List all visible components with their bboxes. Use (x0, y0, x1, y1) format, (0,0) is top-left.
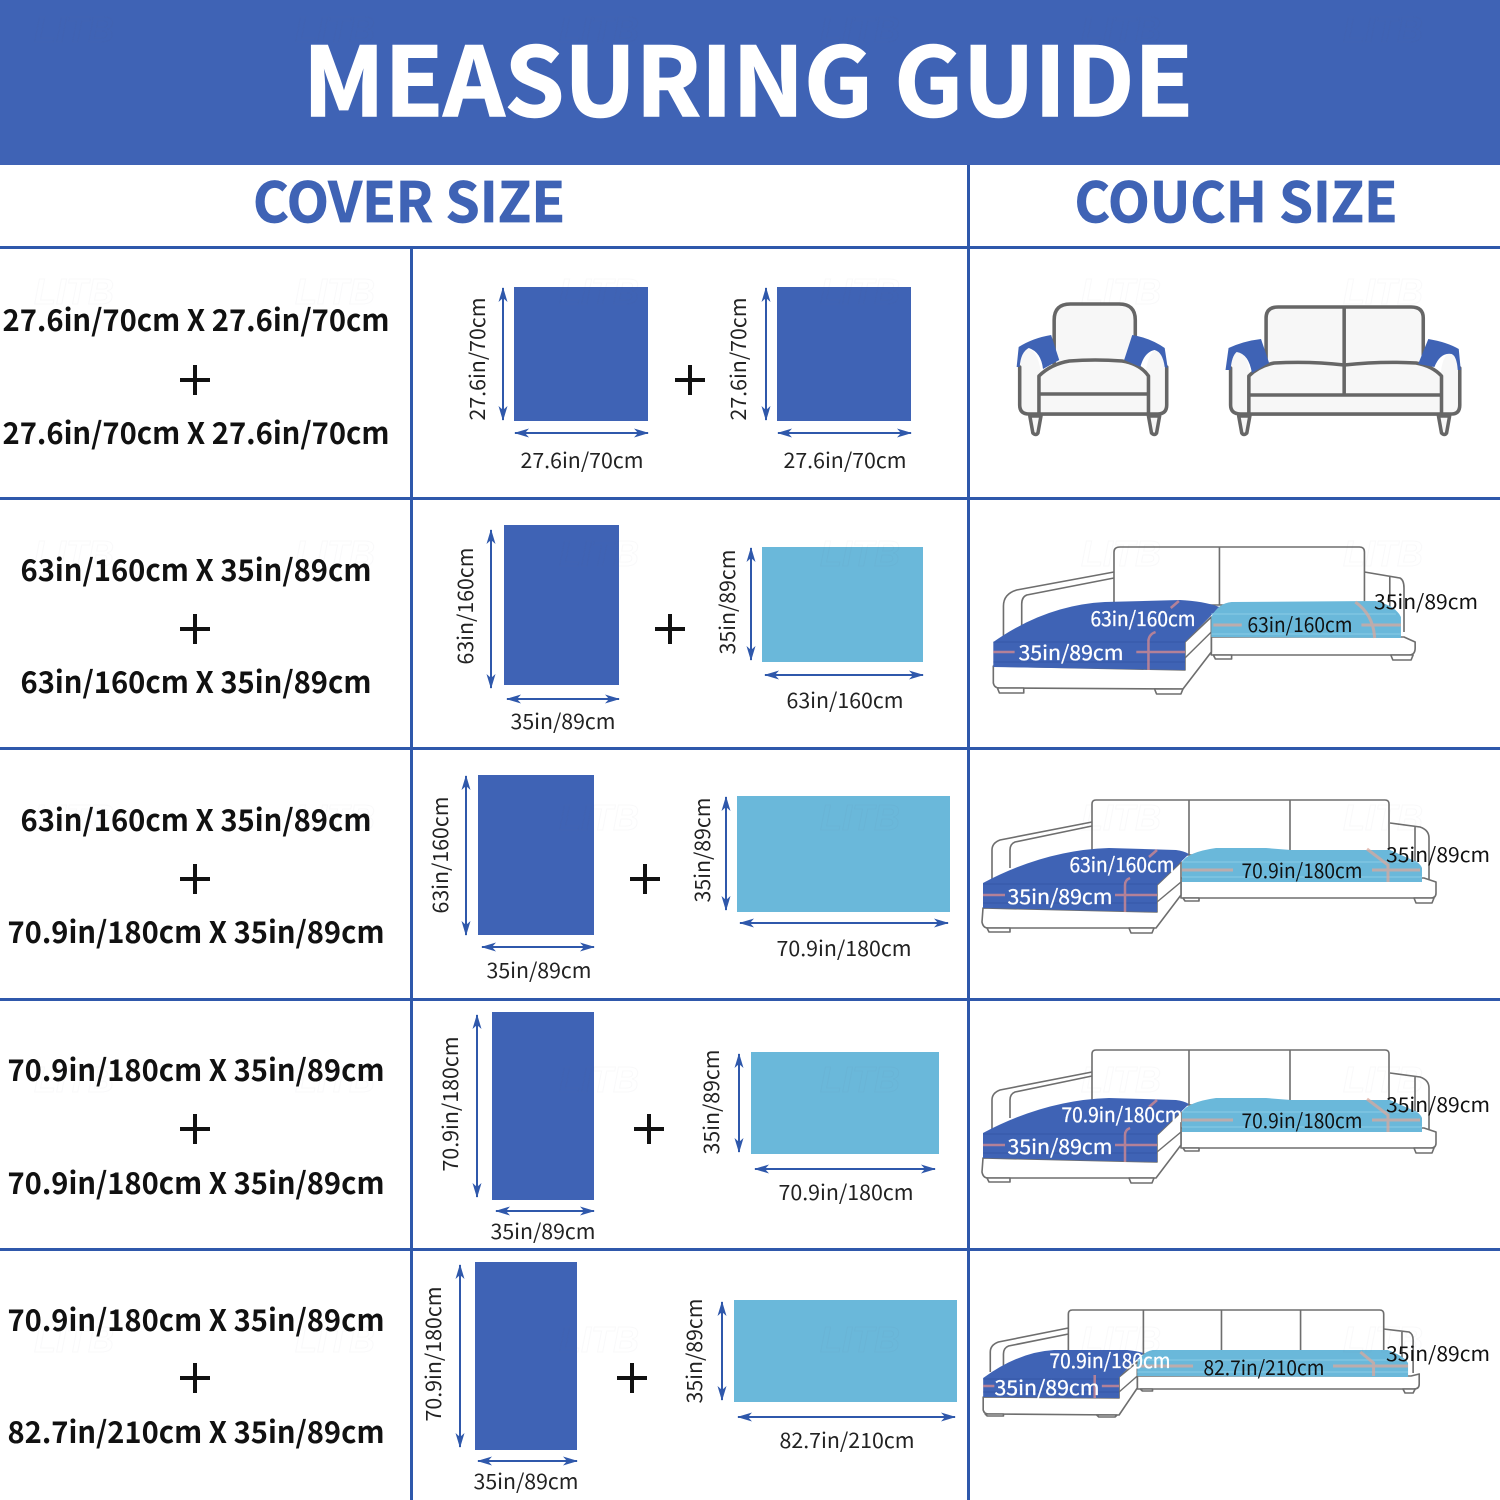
illustration: sectional sofa row 5: 70.9in/180cm (1050, 1345, 1170, 1374)
watermark: LITB repeated: LITB (820, 1059, 900, 1100)
illustration: sectional sofa row 2: 63in/160cm (1248, 609, 1352, 638)
watermark: LITB repeated: LITB (820, 9, 900, 50)
illustration: sectional sofa row 5: 35in/89cm (994, 1372, 1100, 1401)
diagram: row 1 cover panels: 27.6in/70cm (723, 298, 753, 420)
diagram: row 2 cover panels (450, 525, 923, 736)
diagram: row 4 cover panels: 70.9in/180cm (778, 1177, 914, 1207)
size text: row 4 (8, 1046, 384, 1203)
watermark: LITB repeated: LITB (1343, 271, 1423, 312)
watermark: LITB repeated: LITB (1343, 1059, 1423, 1100)
diagram: row 4 cover panels: 35in/89cm (490, 1216, 596, 1246)
size text: row 3 (8, 796, 384, 952)
size text: row 4: 70.9in/180cm X 35in/89cm (8, 1046, 384, 1090)
illustration: sectional sofa row 4: 35in/89cm (1008, 1131, 1112, 1160)
illustration: sectional sofa row 3: 70.9in/180cm (1242, 855, 1362, 884)
size text: row 4: 70.9in/180cm X 35in/89cm (8, 1159, 384, 1203)
diagram: row 1 cover panels: 27.6in/70cm (462, 298, 492, 420)
watermark: LITB repeated: LITB (559, 9, 639, 50)
watermark: LITB repeated: LITB (820, 533, 900, 574)
size text: row 2 (20, 546, 372, 702)
illustration: sectional sofa row 4: 70.9in/180cm (1062, 1099, 1182, 1128)
watermark: LITB repeated: LITB (559, 533, 639, 574)
watermark: LITB repeated: LITB (1343, 797, 1423, 838)
diagram: row 3 cover panels: 35in/89cm (486, 955, 592, 985)
diagram: row 5 cover panels (418, 1262, 957, 1496)
watermark: LITB repeated: LITB (295, 797, 375, 838)
watermark: LITB repeated: LITB (1081, 9, 1161, 50)
illustration: sectional sofa row 2: 35in/89cm (1018, 637, 1124, 666)
watermark: LITB repeated: LITB (34, 797, 114, 838)
watermark: LITB repeated: LITB (295, 533, 375, 574)
illustration: sectional sofa row 2 (993, 547, 1478, 694)
diagram: row 5 cover panels: 35in/89cm (679, 1298, 709, 1404)
watermark: LITB repeated: LITB (34, 533, 114, 574)
illustration: sectional sofa row 5 (983, 1310, 1490, 1417)
watermark: LITB repeated: LITB (34, 271, 114, 312)
watermark: LITB repeated: LITB (34, 9, 114, 50)
diagram: row 4 cover panels: 35in/89cm (696, 1049, 726, 1155)
diagram: row 2 cover panels: 63in/160cm (450, 548, 480, 664)
watermark: LITB repeated: LITB (559, 1059, 639, 1100)
title banner (0, 0, 1500, 165)
illustration: sectional sofa row 3 (982, 800, 1490, 933)
size text: row 3: 70.9in/180cm X 35in/89cm (8, 908, 384, 952)
diagram: row 2 cover panels: 63in/160cm (786, 685, 904, 715)
illustration: sectional sofa row 4: 70.9in/180cm (1242, 1105, 1362, 1134)
illustration: sectional sofa row 3: 35in/89cm (1386, 839, 1490, 868)
diagram: row 5 cover panels: 70.9in/180cm (418, 1286, 448, 1422)
size text: row 5: 70.9in/180cm X 35in/89cm (8, 1296, 384, 1340)
size text: row 1 (2, 296, 390, 453)
watermark: LITB repeated: LITB (295, 1059, 375, 1100)
watermark: LITB repeated: LITB (1081, 271, 1161, 312)
diagram: row 5 cover panels: 82.7in/210cm (780, 1425, 914, 1455)
size text: row 1: 27.6in/70cm X 27.6in/70cm (2, 409, 390, 453)
watermark: LITB repeated: LITB (559, 797, 639, 838)
diagram: row 3 cover panels: 63in/160cm (425, 796, 455, 914)
size text: row 2: 63in/160cm X 35in/89cm (20, 658, 372, 702)
watermark: LITB repeated: LITB (1343, 533, 1423, 574)
watermark: LITB repeated: LITB (559, 1319, 639, 1360)
watermark: LITB repeated: LITB (820, 797, 900, 838)
diagram: row 2 cover panels: 35in/89cm (712, 549, 742, 655)
illustration: sectional sofa row 2: 35in/89cm (1374, 586, 1478, 615)
diagram: row 3 cover panels: 70.9in/180cm (776, 933, 912, 963)
size text: row 3: 63in/160cm X 35in/89cm (20, 796, 372, 840)
illustration: sectional sofa row 5: 82.7in/210cm (1204, 1352, 1324, 1381)
illustration: sectional sofa row 4 (982, 1050, 1490, 1183)
illustration: sectional sofa row 3: 63in/160cm (1070, 849, 1174, 878)
size text: row 5 (8, 1296, 384, 1452)
watermark: LITB repeated: LITB (295, 1319, 375, 1360)
watermark: LITB repeated: LITB (295, 9, 375, 50)
watermark: LITB repeated: LITB (295, 271, 375, 312)
illustration: loveseat with armrest covers (1226, 307, 1461, 434)
watermark: LITB repeated: LITB (559, 271, 639, 312)
illustration: sectional sofa row 3: 35in/89cm (1008, 881, 1112, 910)
size text: row 2: 63in/160cm X 35in/89cm (20, 546, 372, 590)
diagram: row 3 cover panels: 35in/89cm (687, 797, 717, 903)
title banner: MEASURING GUIDE (303, 7, 1193, 144)
watermark: LITB repeated: LITB (1081, 533, 1161, 574)
watermark: LITB repeated: LITB (1081, 1319, 1161, 1360)
diagram: row 1 cover panels: 27.6in/70cm (520, 445, 644, 475)
watermark: LITB repeated: LITB (1343, 9, 1423, 50)
size text: row 5: 82.7in/210cm X 35in/89cm (8, 1408, 384, 1452)
heading: cover size: COVER SIZE (253, 158, 565, 238)
diagram: row 1 cover panels: 27.6in/70cm (784, 445, 906, 475)
diagram: row 2 cover panels: 35in/89cm (510, 706, 616, 736)
watermark: LITB repeated: LITB (820, 1319, 900, 1360)
watermark: LITB repeated: LITB (34, 1319, 114, 1360)
heading: couch size: COUCH SIZE (1074, 158, 1398, 238)
illustration: sectional sofa row 2: 63in/160cm (1090, 603, 1196, 632)
watermark: LITB repeated: LITB (34, 1059, 114, 1100)
watermark: LITB repeated: LITB (1081, 797, 1161, 838)
size text: row 1: 27.6in/70cm X 27.6in/70cm (2, 296, 390, 340)
illustration: sectional sofa row 5: 35in/89cm (1386, 1338, 1490, 1367)
diagram: row 3 cover panels (425, 775, 950, 985)
diagram: row 4 cover panels (435, 1012, 939, 1246)
illustration: sectional sofa row 4: 35in/89cm (1386, 1089, 1490, 1118)
diagram: row 1 cover panels (462, 287, 911, 475)
diagram: row 5 cover panels: 35in/89cm (474, 1466, 578, 1496)
watermark: LITB repeated: LITB (1081, 1059, 1161, 1100)
illustration: armchair with armrest covers (1017, 304, 1168, 434)
watermark: LITB repeated: LITB (820, 271, 900, 312)
diagram: row 4 cover panels: 70.9in/180cm (435, 1036, 465, 1172)
watermark: LITB repeated: LITB (1343, 1319, 1423, 1360)
